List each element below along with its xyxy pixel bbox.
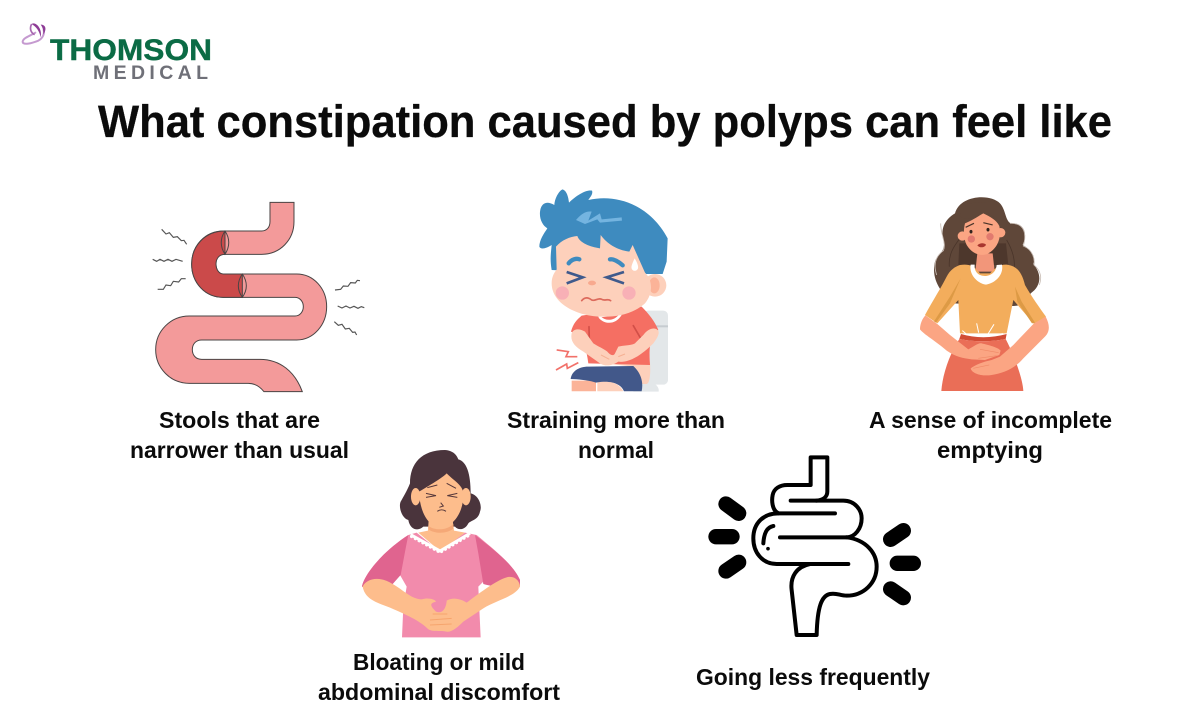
label: Stools that are [159,407,320,433]
icon: boy straining on toilet [539,189,668,392]
label: Straining more than [507,407,725,433]
label: normal [578,437,654,463]
label [507,407,725,463]
panel: bloating [318,450,560,705]
logo: Thomson Medical [23,23,212,84]
icon: woman in pink holding abdomen [362,450,520,637]
panel: going less frequently [696,457,930,690]
label: Going less frequently [696,664,930,690]
label [130,407,349,463]
label [318,649,560,705]
title: What constipation caused by polyps can feel like [98,96,1112,147]
icon: black outline intestine with pain marks [716,457,913,635]
panel: straining [507,189,725,463]
label: emptying [937,437,1043,463]
label: abdominal discomfort [318,679,560,705]
icon: woman with long wavy hair holding stomach [920,197,1049,391]
label: Bloating or mild [353,649,525,675]
icon: butterfly [23,23,45,44]
label [869,407,1112,463]
panel: narrow stools [130,202,364,463]
panel: incomplete emptying [869,197,1112,463]
logo: Thomson Medical: MEDICAL [93,62,208,84]
logo: Thomson Medical: THOMSON [50,34,212,67]
icon: intestine with narrowed red section [153,202,364,392]
label: A sense of incomplete [869,407,1112,433]
label: narrower than usual [130,437,349,463]
